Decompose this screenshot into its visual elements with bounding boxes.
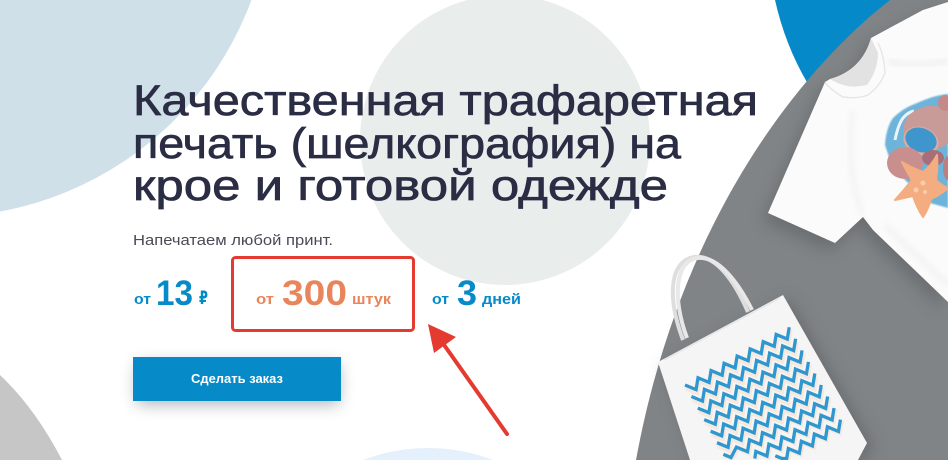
title: крое и готовой одежде xyxy=(133,162,668,210)
background circle: light blue top left xyxy=(0,0,272,217)
stat: time: дней xyxy=(482,291,521,308)
stat: price: 13 xyxy=(156,274,193,313)
subtitle: Напечатаем любой принт. xyxy=(133,232,333,249)
highlight frame xyxy=(232,258,414,330)
print: blue sand xyxy=(885,94,948,208)
stat: time xyxy=(432,274,521,313)
stat: price: ₽ xyxy=(199,288,208,309)
background shape: blue top right xyxy=(775,0,900,84)
background circle: grey bottom left xyxy=(0,375,62,460)
chevron rows xyxy=(686,330,841,460)
button: order: Сделать заказ xyxy=(191,372,283,386)
stat: time: 3 xyxy=(457,274,477,313)
stat: price xyxy=(134,274,208,313)
background shape: large grey arc xyxy=(636,0,948,460)
bag handles xyxy=(673,257,752,340)
stat: quantity: штук xyxy=(352,291,392,308)
print: shell xyxy=(903,106,948,149)
stat: quantity: 300 xyxy=(282,274,347,313)
background circle: pale blue bottom xyxy=(363,448,493,460)
stat: time: от xyxy=(432,291,449,308)
product: white tote bag with chevron print xyxy=(658,257,873,460)
product: white t-shirt with print xyxy=(763,2,948,310)
print: starfish xyxy=(895,155,948,217)
title: печать (шелкография) на xyxy=(133,120,681,168)
title: Качественная трафаретная xyxy=(133,77,758,125)
red arrow xyxy=(428,324,507,434)
button: order xyxy=(133,357,341,404)
print: pebbles xyxy=(887,147,923,179)
title xyxy=(133,77,758,210)
stat: quantity xyxy=(256,274,392,313)
background circle: pale grey centre xyxy=(360,0,650,285)
stat: quantity: от xyxy=(256,291,274,308)
stat: price: от xyxy=(134,291,151,308)
